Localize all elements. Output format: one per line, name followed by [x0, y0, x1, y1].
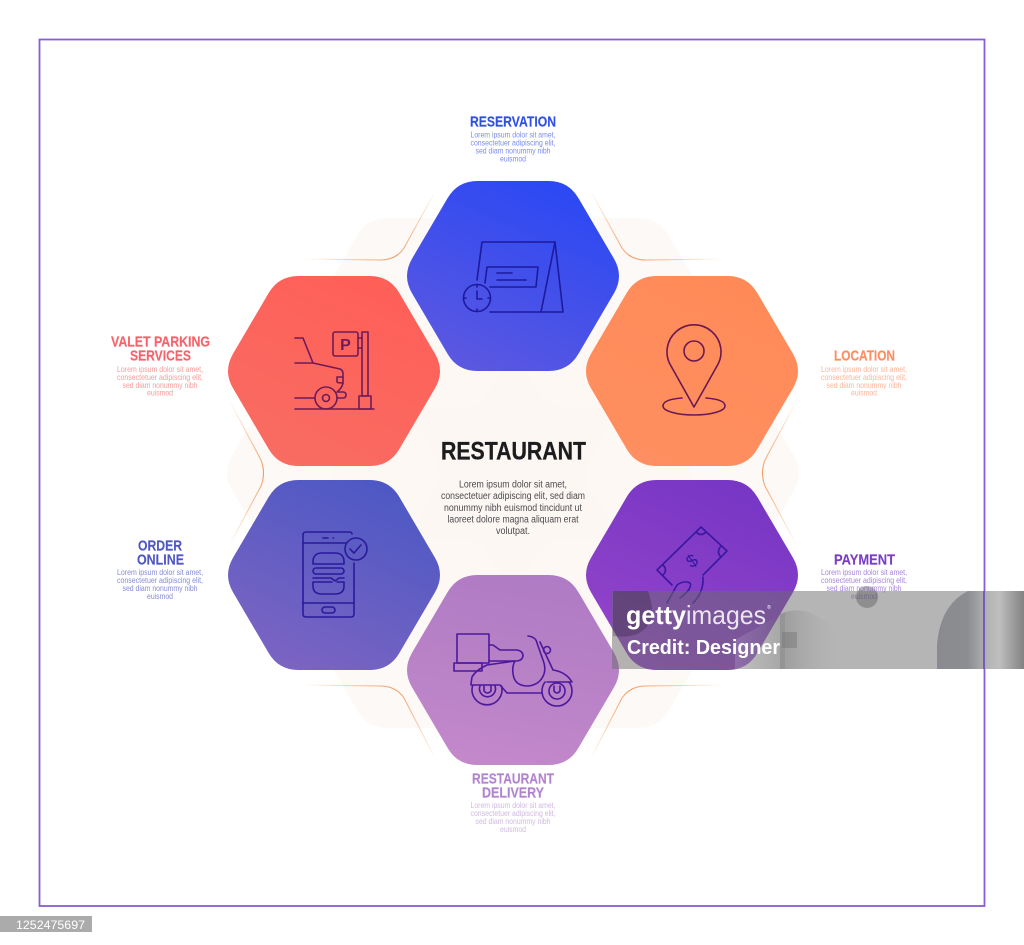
label: payment: euismod [851, 592, 877, 601]
label: payment: PAYMENT [834, 552, 895, 568]
label: valet parking services: euismod [147, 388, 173, 398]
label: order online: sed diam nonummy nibh [122, 584, 198, 593]
icon: valet parking car and sign: P [340, 337, 351, 354]
hexagon: order online [228, 480, 440, 670]
label: order online: Lorem ipsum dolor sit amet, [117, 568, 203, 577]
label: location: sed diam nonummy nibh [826, 381, 902, 390]
center description: nonummy nibh euismod tincidunt ut [444, 503, 582, 514]
label: restaurant delivery: RESTAURANT [472, 770, 554, 788]
label: payment: Lorem ipsum dolor sit amet, [821, 568, 907, 577]
label: location: LOCATION [834, 348, 895, 364]
label: order online: ORDER [138, 538, 182, 554]
hexagon: reservation [407, 181, 619, 371]
icon: location pin [663, 325, 725, 415]
label: valet parking services [111, 334, 210, 398]
label: location: Lorem ipsum dolor sit amet, [821, 365, 907, 374]
label: reservation: euismod [500, 154, 526, 164]
icon: smartphone with burger [303, 532, 367, 617]
icon: hand holding banknote [657, 527, 727, 603]
center description: Lorem ipsum dolor sit amet, [459, 480, 567, 490]
label: restaurant delivery: consectetuer adipiscing elit, [470, 809, 556, 818]
label: reservation [470, 114, 556, 164]
icon: reservation table sign with clock [464, 242, 563, 312]
watermark band [612, 586, 1024, 669]
center description [441, 480, 585, 537]
hexagon: location [586, 276, 798, 466]
center description: volutpat. [496, 526, 530, 537]
center description: consectetuer adipiscing elit, sed diam [441, 491, 585, 502]
icon: hand holding banknote: $ [682, 550, 702, 572]
label: order online [117, 538, 203, 601]
label: reservation: Lorem ipsum dolor sit amet, [470, 130, 556, 140]
center description: laoreet dolore magna aliquam erat [448, 514, 579, 526]
label: reservation: sed diam nonummy nibh [476, 146, 550, 156]
hexagon: payment [586, 480, 798, 670]
icon: valet parking car and sign [295, 332, 374, 409]
icon: delivery scooter [454, 634, 572, 706]
label: valet parking services: Lorem ipsum dolor sit amet, [117, 365, 203, 374]
label: payment [821, 552, 907, 601]
label: valet parking services: VALET PARKING [111, 334, 210, 350]
thin orange connector lines [229, 190, 797, 760]
watermark band: getty [626, 600, 687, 630]
label: restaurant delivery [470, 770, 556, 834]
label: reservation: RESERVATION [470, 114, 556, 130]
label: valet parking services: SERVICES [130, 348, 191, 364]
label: payment: sed diam nonummy nibh [826, 584, 902, 593]
image id tag [0, 916, 92, 932]
label: restaurant delivery: sed diam nonummy nibh [476, 817, 550, 826]
label: order online: euismod [147, 592, 173, 601]
image id tag: 1252475697 [16, 918, 85, 932]
label: location: euismod [851, 388, 877, 398]
pale background hexagons [227, 218, 799, 728]
label: valet parking services: sed diam nonummy nibh [122, 381, 198, 390]
hexagon: restaurant delivery [407, 575, 619, 765]
watermark band: ® [767, 604, 771, 611]
label: location [821, 348, 907, 398]
watermark band: Credit: Designer [627, 637, 780, 659]
label: payment: consectetuer adipiscing elit, [821, 576, 907, 585]
hexagon: valet parking [228, 276, 440, 466]
label: order online: ONLINE [137, 552, 184, 568]
label: restaurant delivery: Lorem ipsum dolor sit amet, [470, 801, 556, 810]
watermark band: images [686, 600, 766, 630]
label: location: consectetuer adipiscing elit, [821, 373, 907, 382]
label: restaurant delivery: euismod [500, 825, 526, 834]
center title: RESTAURANT [441, 438, 586, 466]
label: valet parking services: consectetuer adipiscing elit, [117, 373, 203, 382]
label: order online: consectetuer adipiscing elit, [117, 576, 203, 585]
label: restaurant delivery: DELIVERY [482, 784, 544, 802]
label: reservation: consectetuer adipiscing elit, [470, 138, 556, 148]
